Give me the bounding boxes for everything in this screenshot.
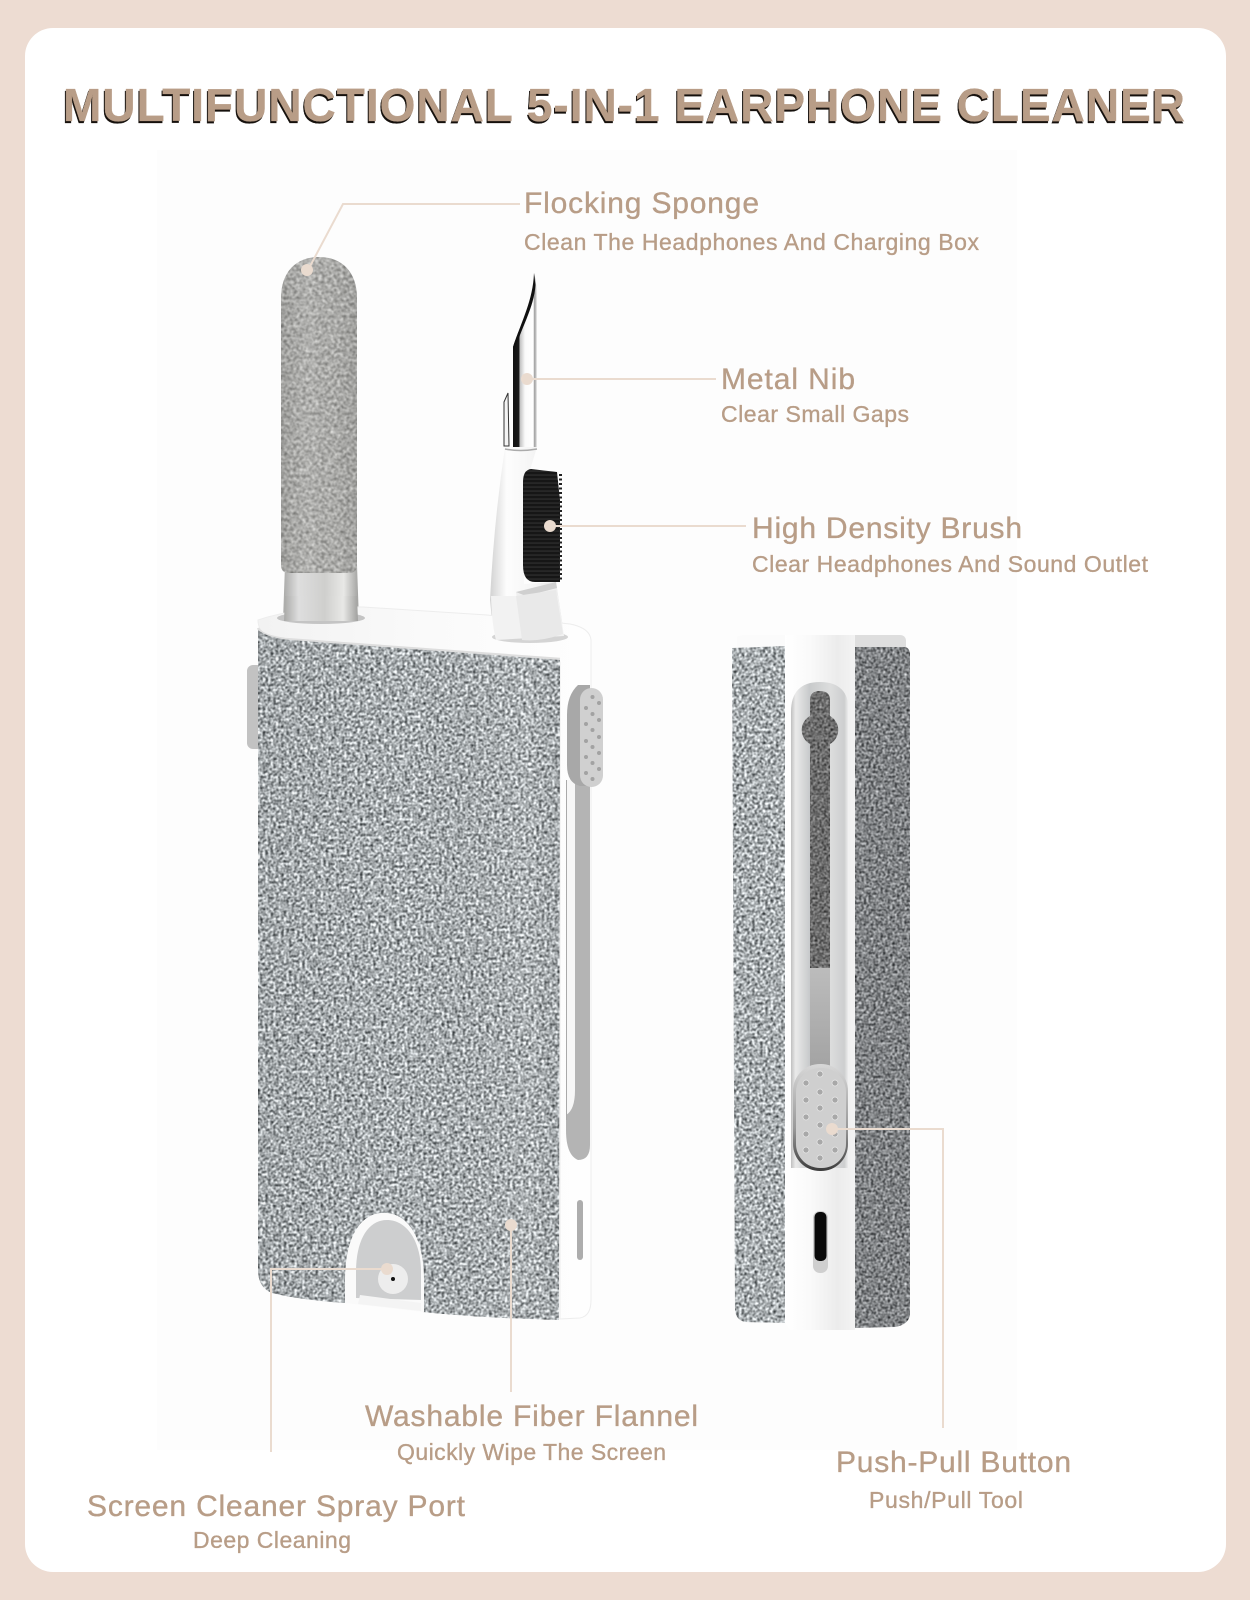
slider slot [791, 682, 849, 1168]
leader line [826, 1123, 943, 1428]
metal nib and brush tool [490, 273, 566, 640]
light flannel panel [732, 646, 785, 1323]
callout: metal nib [521, 363, 909, 427]
side slider track [566, 780, 590, 1260]
device: main cleaner body with tools [247, 257, 603, 1320]
leader line [271, 1263, 393, 1452]
dark flannel panel [855, 647, 910, 1328]
collar and tool holes [277, 590, 568, 643]
description: Clean The Headphones And Charging Box [524, 229, 980, 255]
spray port [345, 1213, 424, 1312]
callout: flocking sponge [301, 187, 980, 276]
callout: push-pull button [826, 1123, 1071, 1513]
leader line [521, 373, 716, 385]
plate shadow line [258, 628, 560, 659]
heading: Metal Nib [721, 363, 855, 396]
high density brush [523, 469, 560, 582]
lower channel [810, 968, 830, 1068]
washable fibre flannel panel [258, 630, 560, 1320]
white top plate [258, 607, 591, 1319]
callout: washable fiber flannel [365, 1219, 698, 1465]
device: side view of cleaner [732, 635, 910, 1330]
heading: Screen Cleaner Spray Port [87, 1490, 466, 1523]
heading: Flocking Sponge [524, 187, 759, 220]
left side button [247, 665, 263, 749]
faint product photo backdrop [157, 150, 1017, 1450]
charging slot [813, 1211, 828, 1273]
callout: screen cleaner spray port [87, 1263, 466, 1553]
heading: Push-Pull Button [836, 1446, 1071, 1479]
flocking sponge tool [281, 257, 359, 621]
leader line [505, 1219, 517, 1392]
top cap [737, 635, 906, 647]
side push button [567, 685, 603, 787]
description: Clear Small Gaps [721, 401, 909, 427]
description: Quickly Wipe The Screen [397, 1439, 666, 1465]
description: Deep Cleaning [193, 1527, 351, 1553]
callout: high density brush [544, 512, 1149, 577]
white centre spine [785, 635, 855, 1330]
description: Clear Headphones And Sound Outlet [752, 551, 1149, 577]
push-pull button [793, 1064, 848, 1171]
leader line [544, 520, 746, 532]
description: Push/Pull Tool [869, 1487, 1023, 1513]
heading: High Density Brush [752, 512, 1022, 545]
title: MULTIFUNCTIONAL 5-IN-1 EARPHONE CLEANER [63, 79, 1185, 131]
leader line [301, 204, 520, 276]
upper dark channel [802, 691, 838, 968]
heading: Washable Fiber Flannel [365, 1400, 698, 1433]
